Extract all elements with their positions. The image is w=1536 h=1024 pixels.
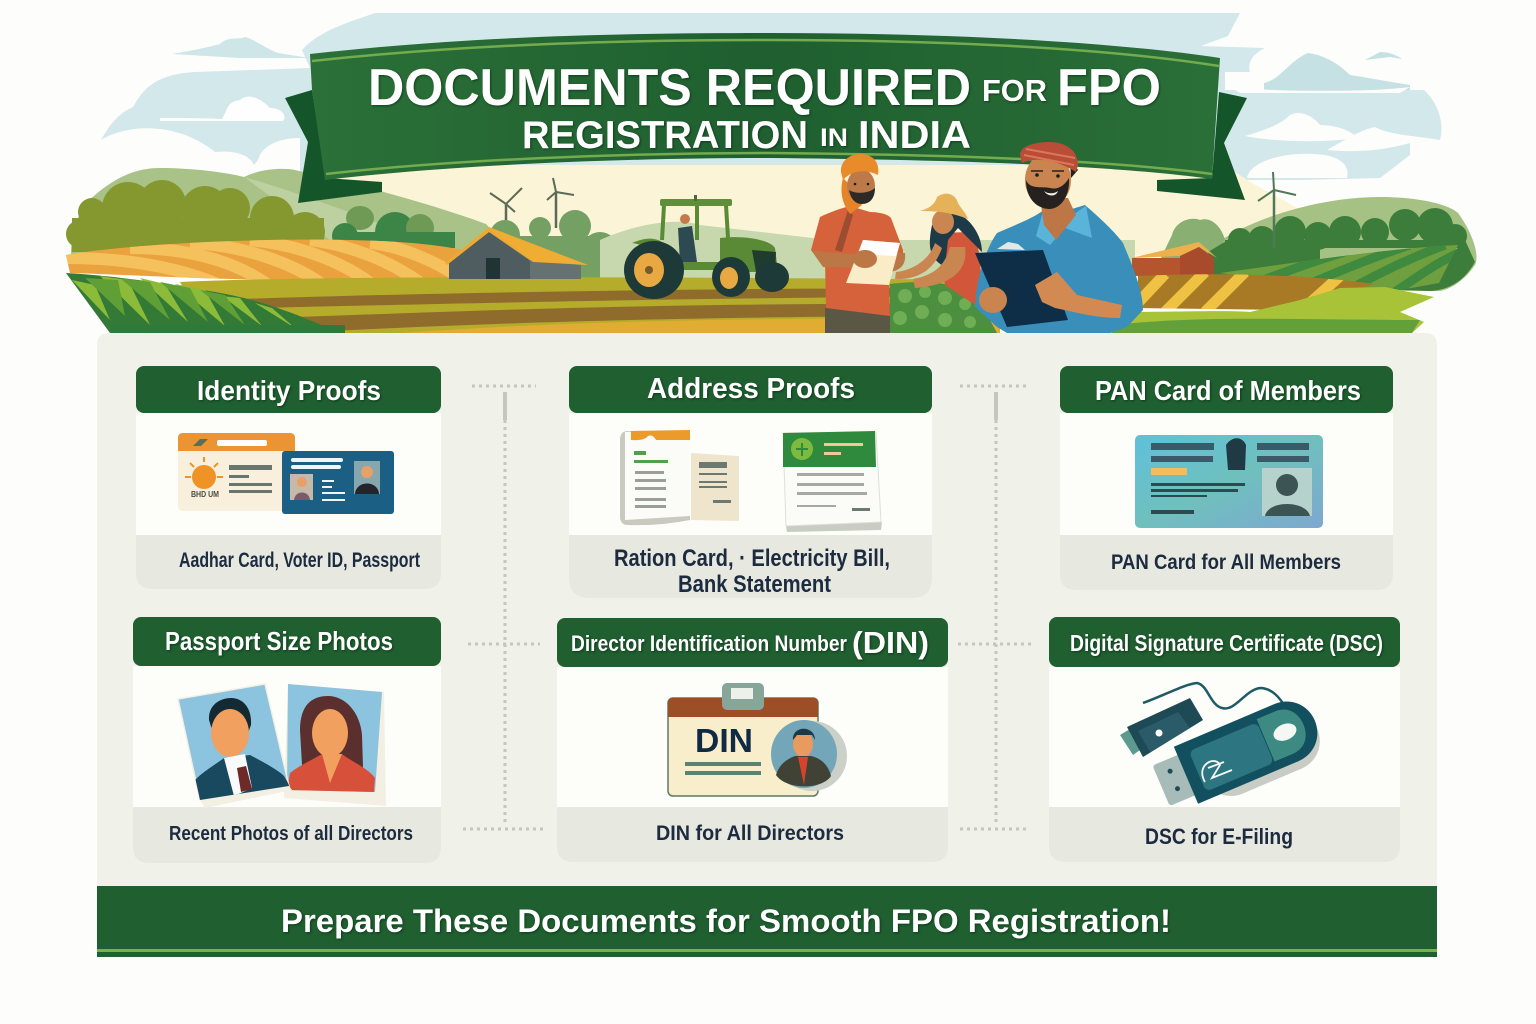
left green crops	[66, 273, 345, 333]
cream sky glow	[320, 165, 1310, 255]
caption: identity proofs: Aadhar Card, Voter ID, Passport	[179, 549, 420, 572]
icon: din badge	[668, 683, 847, 796]
right striped green field	[1220, 245, 1458, 290]
header: din	[557, 618, 948, 667]
right lime crops	[1110, 287, 1434, 333]
main content panel	[97, 333, 1437, 890]
left hills	[71, 168, 520, 260]
icon: pan card	[1135, 435, 1323, 528]
icon: din badge: DIN	[695, 722, 753, 759]
card: address proofs	[569, 366, 932, 598]
footer text: Prepare These Documents for Smooth FPO Registration!	[281, 903, 1171, 939]
caption: passport photos: Recent Photos of all Directors	[169, 823, 413, 845]
red farmhouse	[1131, 242, 1217, 276]
caption: din: DIN for All Directors	[656, 822, 844, 845]
card: address proofs: Bank Statement	[678, 571, 831, 598]
plant bush	[890, 282, 997, 333]
barn	[445, 227, 588, 279]
sky with clouds	[100, 13, 1441, 180]
card: passport photos: Passport Size Photos	[165, 626, 393, 656]
title banner: FOR	[982, 73, 1047, 108]
title banner: IN	[820, 124, 848, 152]
card: pan card: PAN Card of Members	[1095, 375, 1361, 406]
card: din: (DIN)	[852, 625, 929, 660]
title line two: REGISTRATION	[522, 114, 808, 157]
icon: ration card and bill	[620, 430, 882, 532]
card: passport photos	[133, 617, 441, 863]
icon: aadhaar and voter cards: BHD UM	[191, 490, 219, 499]
banner right tail	[1157, 92, 1247, 200]
farmer with clipboard	[975, 142, 1143, 333]
dotted connectors	[463, 386, 1032, 829]
card: dsc: Digital Signature Certificate (DSC)	[1070, 630, 1383, 656]
green tractor	[624, 195, 789, 299]
cultivated ground rows	[170, 276, 1010, 336]
card: din: Director Identification Number	[571, 631, 847, 656]
card: identity proofs: Identity Proofs	[197, 375, 381, 406]
card: din	[557, 618, 948, 862]
banner left tail	[285, 90, 382, 203]
right hills and trees	[1160, 172, 1476, 291]
header: address proofs	[569, 366, 932, 413]
icon: usb dsc token	[1120, 683, 1330, 822]
banner body	[310, 33, 1220, 180]
header: passport photos	[133, 617, 441, 666]
header: identity proofs	[136, 366, 441, 413]
header: dsc	[1049, 617, 1400, 667]
caption: dsc: DSC for E-Filing	[1145, 824, 1293, 849]
caption: pan card: PAN Card for All Members	[1111, 551, 1341, 574]
mid green trees	[332, 206, 455, 252]
farmer with paper	[811, 154, 905, 333]
title banner: FPO	[1057, 59, 1161, 117]
tractor driver	[678, 214, 697, 262]
card: identity proofs	[136, 366, 441, 589]
left wheat field	[66, 240, 462, 280]
title line one: DOCUMENTS REQUIRED	[368, 59, 971, 117]
header: pan card	[1060, 366, 1393, 413]
illustrated farm header scene	[60, 13, 1476, 336]
right yellow striped field	[1138, 274, 1374, 310]
woman with hat	[895, 194, 982, 305]
title banner	[285, 33, 1247, 203]
distant windmills	[490, 178, 574, 228]
card: pan card	[1060, 366, 1393, 590]
clipboard	[975, 242, 1068, 327]
card: dsc	[1049, 617, 1400, 862]
caption: address proofs: Ration Card, · Electricity Bill,	[614, 545, 890, 572]
card: address proofs: Address Proofs	[647, 373, 855, 405]
footer banner	[97, 886, 1437, 957]
background meadow	[600, 222, 1135, 285]
left olive trees	[66, 180, 325, 252]
icon: two passport photos	[178, 684, 386, 808]
icon: aadhaar and voter cards	[178, 433, 394, 514]
title banner: INDIA	[858, 114, 971, 157]
